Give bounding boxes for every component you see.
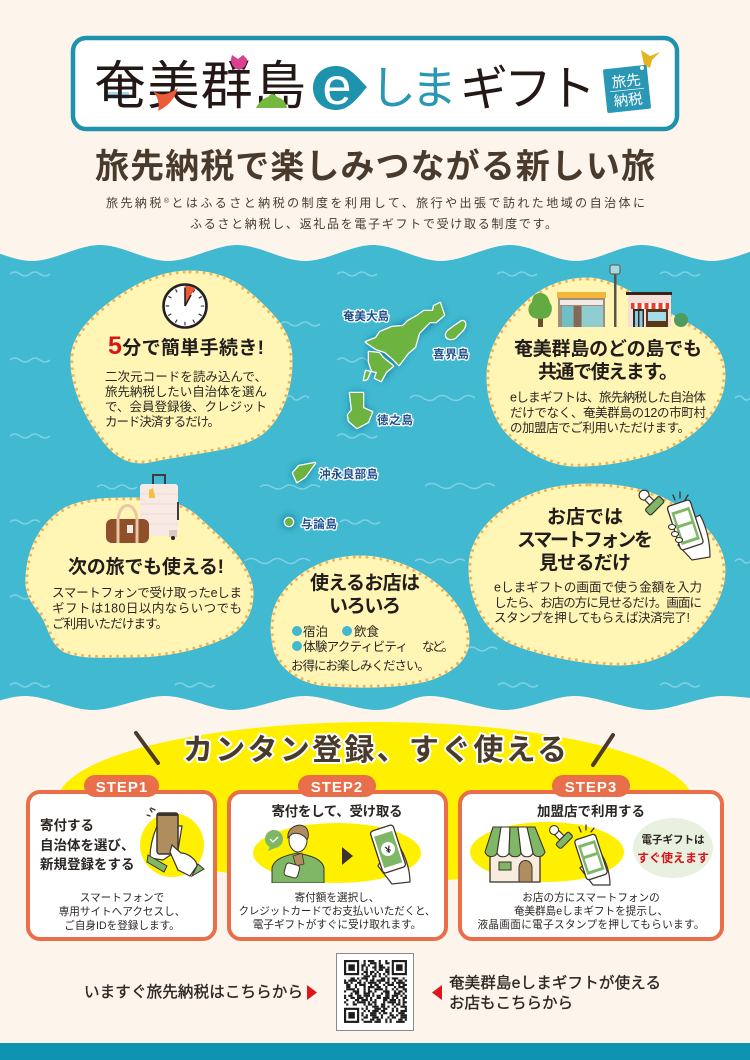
step description: クレジットカードでお支払いいただくと、 — [238, 904, 436, 918]
callout: usable immediately — [633, 818, 713, 878]
panel: usable on any island — [488, 265, 724, 465]
shop categories list: 宿泊 — [303, 625, 328, 639]
step description: 寄付額を選択し、 — [295, 891, 379, 904]
step badge: STEP2 — [311, 779, 363, 796]
panel: step 2 — [229, 775, 446, 939]
arrow: left — [432, 985, 442, 1000]
callout: usable immediately: 電子ギフトは — [642, 834, 705, 846]
step badge — [552, 775, 630, 797]
logo text: shima: しま — [370, 62, 457, 114]
footer bar — [0, 1043, 750, 1060]
step description: ご自身IDを登録します。 — [64, 919, 180, 932]
map label: 喜界島 — [433, 347, 470, 361]
panel: step 3 — [460, 775, 722, 939]
shop categories list: お得にお楽しみください。 — [291, 658, 430, 673]
step description: お店の方にスマートフォンの — [522, 891, 660, 904]
island: Okinoerabu — [293, 463, 315, 482]
step badge — [84, 775, 159, 797]
icon: stamp and phone — [633, 484, 710, 560]
step heading: 自治体を選び、 — [40, 837, 134, 853]
island: Kikai — [446, 321, 465, 339]
step heading: 加盟店で利用する — [537, 804, 645, 819]
icon: travel bag — [106, 506, 149, 543]
logo tag: tabisaki nozei — [603, 50, 660, 113]
logo tag: tabisaki nozei: 旅先 — [611, 72, 642, 92]
call to action: right: お店もこちらから — [449, 994, 573, 1012]
panel: various shops — [272, 557, 468, 686]
icon: tree — [528, 293, 552, 327]
map: Amami islands — [283, 303, 470, 531]
step heading: 寄付をして、受け取る — [272, 803, 402, 819]
shop categories list: 体験アクティビティ — [303, 639, 408, 654]
body text: カード決済するだけ。 — [105, 415, 220, 429]
body text: の加盟店でご利用いただけます。 — [510, 420, 690, 435]
heading: 共通で使えます。 — [538, 361, 678, 383]
icon: bush — [674, 313, 688, 327]
step heading: 寄付する — [40, 817, 94, 833]
step badge — [298, 775, 376, 797]
logo text: gift: ギフト — [460, 63, 596, 116]
logo mark: e teardrop — [313, 58, 367, 116]
step description: 電子ギフトがすぐに受け取れます。 — [253, 918, 421, 931]
callout: usable immediately: すぐ使えます — [637, 850, 709, 865]
body text: スマートフォンで受け取ったeしま — [52, 586, 242, 600]
step description — [238, 891, 436, 931]
icon: suitcase — [140, 475, 179, 540]
step description — [59, 892, 185, 932]
icon: phone tap — [140, 808, 204, 877]
step heading — [40, 817, 134, 872]
heading: お店では — [547, 506, 623, 528]
step description: 液晶画面に電子スタンプを押してもらいます。 — [478, 918, 704, 931]
intro text: ® — [164, 197, 170, 205]
intro text — [106, 195, 645, 231]
body text — [52, 586, 242, 631]
shop categories list: 飲食 — [354, 624, 380, 639]
logo accent: green hill — [256, 94, 287, 108]
body text: ご利用いただけます。 — [52, 616, 168, 631]
heading: スマートフォンを — [517, 529, 653, 551]
map label: 沖永良部島 — [319, 467, 378, 481]
heading — [514, 337, 702, 383]
logo accent: red bird — [152, 88, 178, 111]
intro text: 旅先納税 — [106, 196, 161, 210]
icon: street lamp — [610, 265, 620, 327]
intro text: とはふるさと納税の制度を利用して、旅行や出張で訪れた地域の自治体に — [171, 195, 645, 210]
step heading: 新規登録をする — [40, 857, 134, 872]
heading — [310, 572, 420, 617]
step description: 専用サイトへアクセスし、 — [59, 906, 185, 918]
shop categories list — [291, 624, 454, 673]
heading: 5分で簡単手続き! — [108, 332, 264, 360]
map label: 与論島 — [301, 517, 338, 531]
island: Amami Oshima — [364, 303, 444, 381]
heading: いろいろ — [329, 596, 401, 617]
body text: 二次元コードを読み込んで、 — [105, 370, 267, 384]
step badge: STEP3 — [565, 779, 617, 796]
call to action: right: 奄美群島eしまギフトが使える — [449, 974, 661, 992]
arrow: right — [307, 985, 317, 1000]
body text: eしまギフトは、旅先納税した自治体 — [510, 390, 706, 404]
heading: 見せるだけ — [539, 553, 631, 574]
island shadows — [283, 303, 466, 528]
icon: clock — [164, 284, 206, 328]
call to action: left: いますぐ旅先納税はこちらから — [84, 983, 303, 1001]
body text: で、会員登録後、クレジット — [105, 399, 267, 414]
panel: sea background — [0, 245, 750, 710]
body text — [494, 580, 702, 625]
body text: 旅先納税したい自治体を選ん — [105, 384, 267, 399]
icon: convenience store — [557, 292, 606, 327]
logo text: Amami islands: 奄美群島 — [94, 58, 306, 116]
panel: just show your smartphone — [470, 484, 724, 664]
panel: five minutes — [72, 272, 291, 462]
body text — [510, 390, 706, 435]
intro text: ふるさと納税し、返礼品を電子ギフトで受け取る制度です。 — [190, 216, 557, 231]
logo accent: water in first glyph — [104, 92, 129, 99]
illustration: person receiving gift on phone: ¥ — [384, 844, 393, 857]
step description: スマートフォンで — [80, 892, 164, 904]
icon: shop — [626, 292, 672, 327]
heading: 次の旅でも使える! — [68, 556, 224, 578]
island: Tokunoshima — [348, 393, 372, 428]
step description — [478, 891, 704, 931]
decoration: yellow ellipse behind steps — [57, 722, 693, 882]
map label: 徳之島 — [377, 413, 414, 427]
body text: したら、お店の方に見せるだけ。画面に — [494, 595, 702, 610]
heading — [517, 506, 653, 574]
map label: 奄美大島 — [343, 309, 390, 323]
body text: eしまギフトの画面で使う金額を入力 — [494, 580, 702, 594]
logo accent: pink tulip — [231, 55, 247, 70]
QR code — [336, 954, 414, 1030]
island: Yoron — [285, 518, 293, 526]
body text — [105, 370, 267, 429]
title: 旅先納税で楽しみつながる新しい旅 — [95, 147, 655, 186]
illustration: shop, stamp, phone — [470, 821, 624, 885]
heading: easy registration: カンタン登録、すぐ使える — [183, 734, 567, 767]
panel: logo box — [73, 38, 677, 129]
logo tag: tabisaki nozei: 納税 — [613, 90, 644, 110]
panel: next trip — [27, 475, 252, 656]
illustration: person receiving gift on phone — [253, 823, 421, 884]
heading: 奄美群島のどの島でも — [514, 337, 702, 360]
call to action: right — [432, 974, 661, 1012]
body text: ギフトは180日以内ならいつでも — [52, 602, 242, 616]
panel: step 1 — [28, 775, 215, 939]
step badge: STEP1 — [96, 779, 148, 796]
body text: スタンプを押してもらえば決済完了! — [494, 611, 690, 625]
logo mark: e teardrop: e — [323, 58, 351, 116]
heading: 使えるお店は — [310, 572, 420, 594]
step description: 奄美群島eしまギフトを提示し、 — [514, 904, 668, 918]
shop categories list: など。 — [422, 640, 454, 654]
body text: だけでなく、奄美群島の12の市町村 — [510, 405, 706, 420]
